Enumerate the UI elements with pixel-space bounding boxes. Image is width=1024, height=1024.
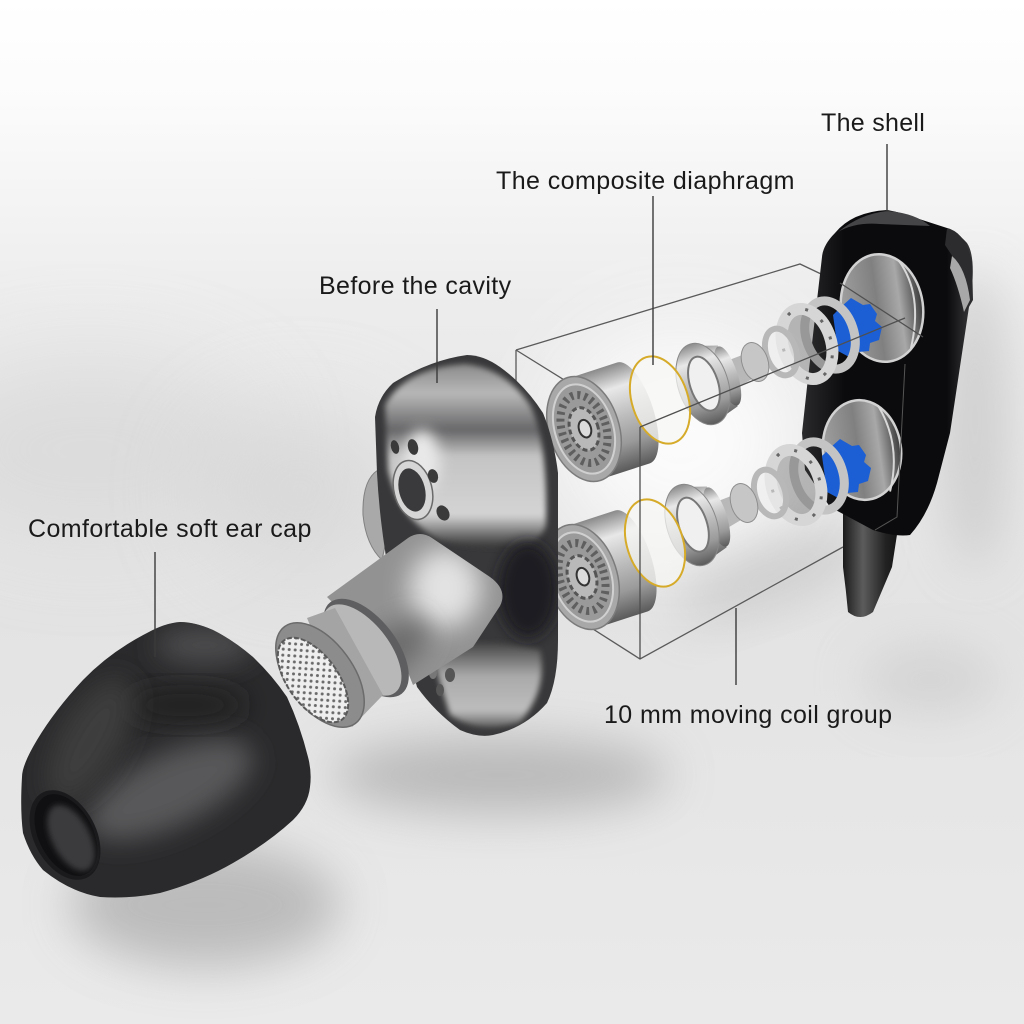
mesh filter xyxy=(264,626,362,734)
wireframe box back edges xyxy=(516,264,843,659)
label: comfortable soft ear cap: Comfortable soft ear cap xyxy=(28,515,312,543)
label: the shell: The shell xyxy=(821,109,925,137)
leader lines xyxy=(155,144,887,685)
label: before the cavity: Before the cavity xyxy=(319,272,512,300)
nozzle head ring xyxy=(258,607,382,743)
lower composite diaphragm xyxy=(614,492,696,594)
cavity body xyxy=(375,355,558,736)
ear cap opening xyxy=(15,778,115,892)
upper driver stack xyxy=(666,294,882,432)
part: before the cavity xyxy=(275,355,558,736)
label: 10 mm moving coil group: 10 mm moving coil group xyxy=(604,701,892,729)
shell body xyxy=(802,210,973,535)
vent holes xyxy=(389,438,455,696)
nozzle neck xyxy=(327,534,502,685)
part: soft ear cap xyxy=(21,622,311,898)
nozzle collar xyxy=(307,584,425,712)
lower driver stack xyxy=(655,435,871,573)
part: the shell xyxy=(802,210,973,617)
shell interior guide lines xyxy=(875,364,905,530)
side lobe xyxy=(363,470,395,560)
label: the composite diaphragm: The composite diaphragm xyxy=(496,167,795,195)
upper magnet xyxy=(534,355,669,491)
lower magnet xyxy=(532,503,667,639)
shell upper cup xyxy=(834,249,930,367)
center port xyxy=(387,456,439,524)
nozzle mid cylinder xyxy=(307,608,383,727)
shell lower cup xyxy=(816,395,908,505)
upper composite diaphragm xyxy=(619,349,701,451)
shell plug xyxy=(843,505,900,617)
soft background shading and shadows xyxy=(0,270,1010,967)
wireframe box front edges xyxy=(640,283,923,659)
